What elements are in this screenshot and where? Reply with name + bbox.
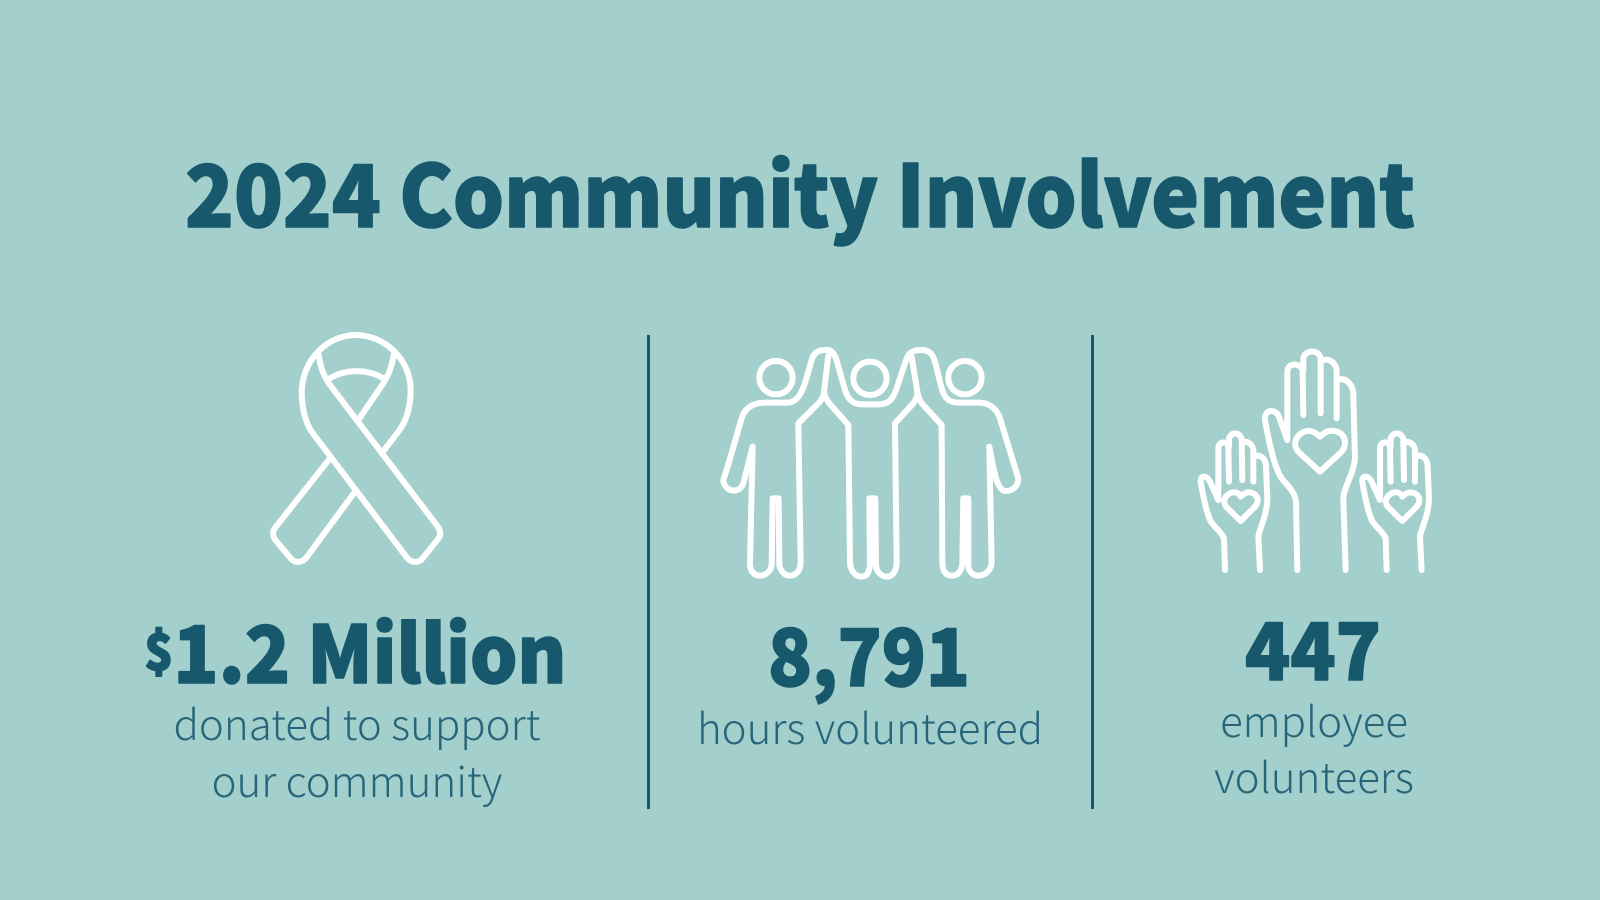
icon: centre hand [1265,351,1355,570]
icon: left hand [1201,433,1267,570]
icon: ribbon [273,335,440,562]
label: hours volunteered: hours volunteered [697,696,1043,757]
panel: donations [144,335,566,810]
divider: left [647,335,650,809]
stat: $1.2 Million: 1.2 Million [173,591,566,706]
label: employee volunteers: employee [1220,689,1408,750]
panel: hours [697,350,1043,757]
icon: right hand [1362,433,1429,570]
divider: right [1091,335,1094,809]
stat: 8,791: 8,791 [768,594,970,709]
stat: 447: 447 [1245,588,1381,703]
label: employee volunteers: volunteers [1214,745,1414,806]
title: 2024 Community Involvement [185,127,1415,252]
icon: people high-five [723,350,1018,577]
stat: $1.2 Million: $ [144,613,173,685]
label: donated to support our community: our community [212,749,503,810]
label: employee volunteers [1214,689,1414,806]
panel: volunteers [1201,351,1429,806]
label: donated to support our community [174,692,541,810]
label: donated to support our community: donated to support [174,692,541,753]
icon: raised hands with hearts [1201,351,1429,570]
